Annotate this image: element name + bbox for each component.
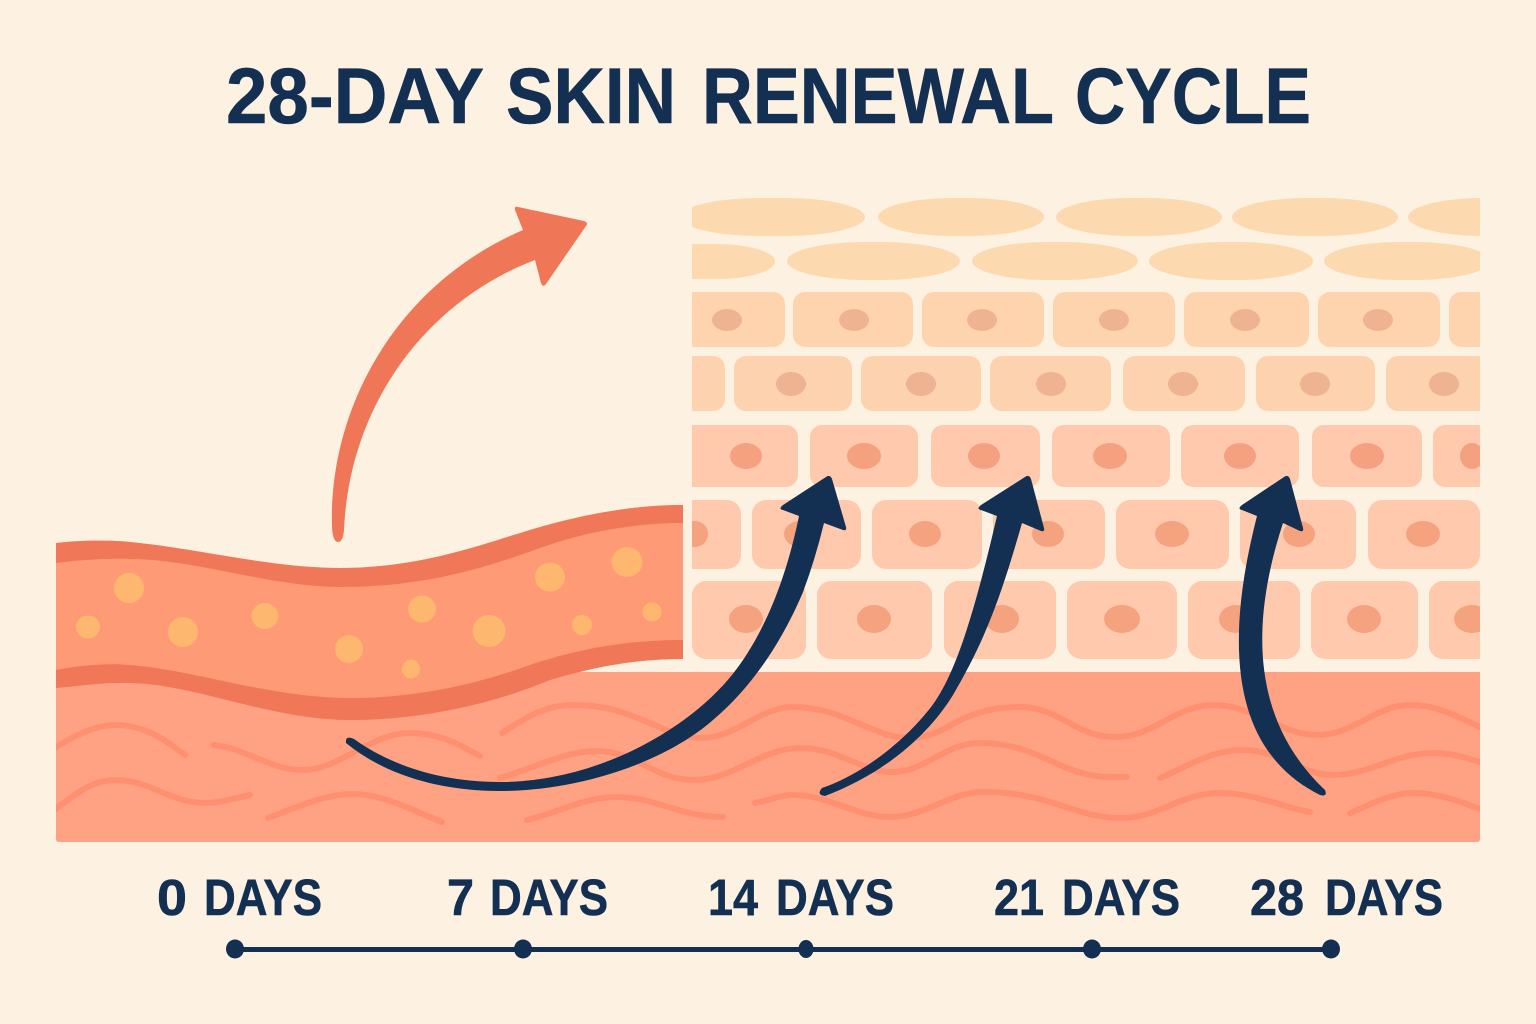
title: 28-DAY — [226, 51, 484, 140]
panel: dermis layer with fibres — [50, 672, 1490, 842]
title: CYCLE — [1075, 51, 1311, 140]
label: 7 days: 7 — [447, 869, 474, 926]
cell row 5 — [670, 425, 1513, 487]
title: SKIN — [506, 51, 676, 140]
cell row 7 — [692, 581, 1509, 659]
cell row 3 — [670, 292, 1509, 347]
label: 21 days: 21 — [994, 869, 1044, 926]
label: 14 days — [708, 869, 894, 926]
cell row 4 — [670, 356, 1506, 411]
flattened surface cells, top row — [680, 198, 1536, 236]
label: 7 days: DAYS — [490, 869, 608, 926]
label: 7 days — [447, 869, 608, 926]
timeline — [226, 940, 1340, 958]
panel: skin cell layers — [692, 198, 1480, 659]
arrow: navy arrow from day 14 — [820, 476, 1044, 796]
dermis fibres — [50, 705, 1490, 822]
arrow: navy arrow from day 21 — [1239, 476, 1326, 795]
title — [226, 51, 1311, 140]
label: 14 days: 14 — [708, 869, 759, 926]
arrow: navy arrow from day 0 — [346, 476, 846, 791]
label: 28 days: DAYS — [1325, 869, 1443, 926]
label: 21 days: DAYS — [1062, 869, 1180, 926]
band upper edge — [56, 505, 683, 587]
arrow: orange shedding arrow — [332, 207, 587, 542]
yellow dots — [76, 547, 662, 678]
label: 28 days: 28 — [1250, 869, 1304, 926]
label: 0 days: 0 — [157, 869, 187, 926]
label: 0 days — [157, 869, 322, 926]
band body — [56, 505, 683, 720]
panel: damaged skin band — [56, 505, 683, 720]
flattened surface cells, second row — [640, 242, 1490, 280]
label: 14 days: DAYS — [776, 869, 894, 926]
label: 28 days — [1250, 869, 1443, 926]
title: RENEWAL — [702, 51, 1054, 140]
band lower edge — [56, 640, 683, 720]
label: 21 days — [994, 869, 1180, 926]
cell row 6 — [670, 500, 1480, 569]
label: 0 days: DAYS — [204, 869, 322, 926]
